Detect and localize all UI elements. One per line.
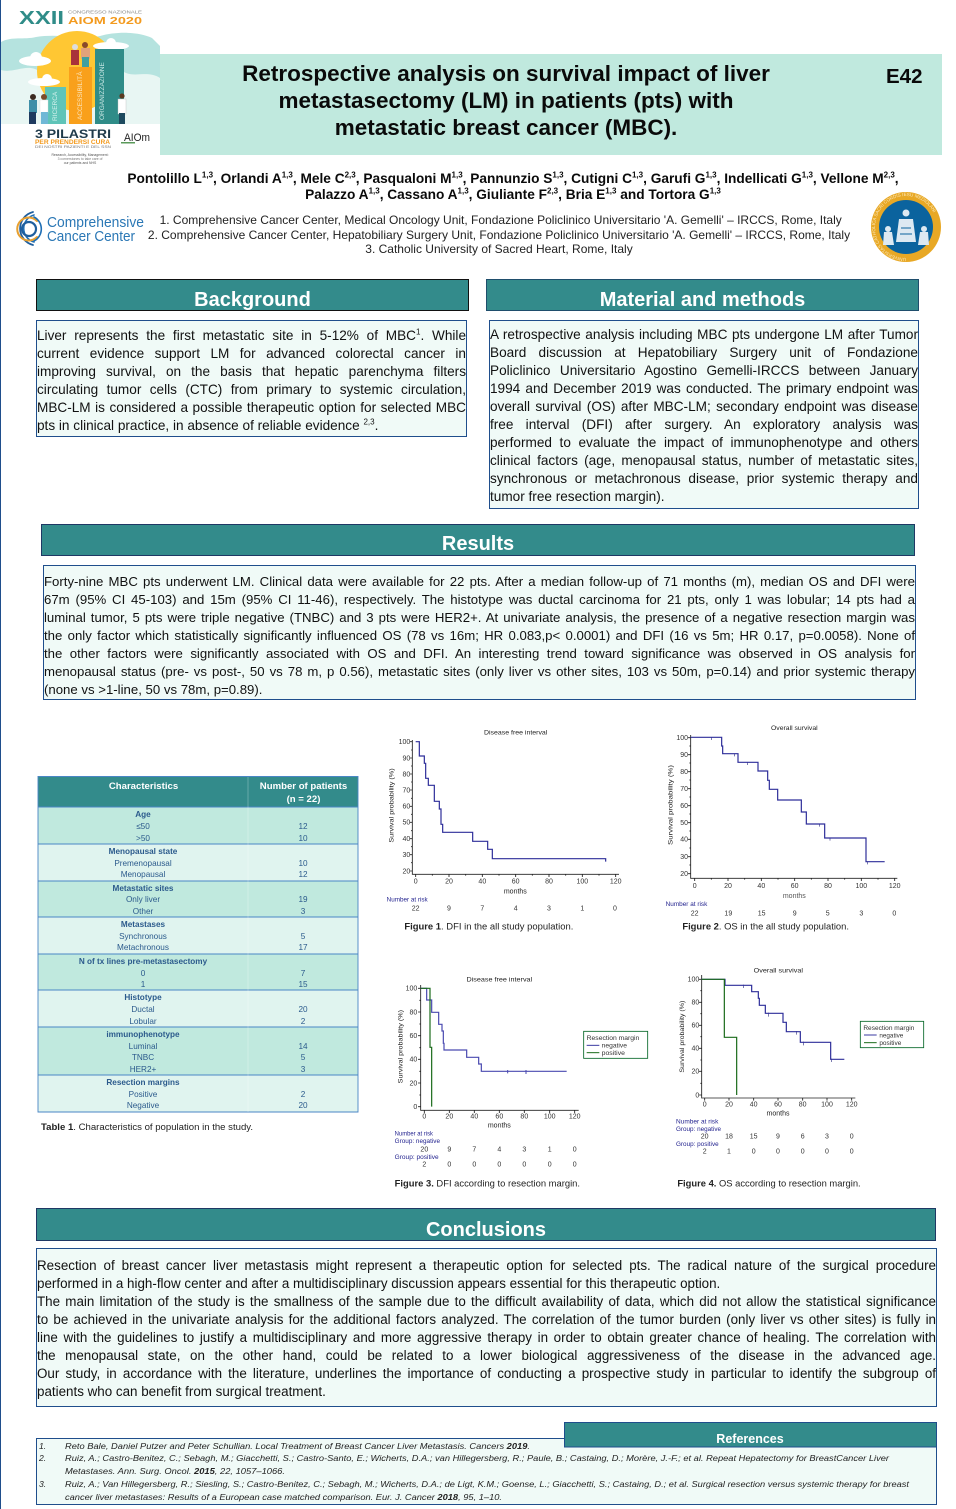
chart: figure 4 OS by resection margin: 0 bbox=[752, 1148, 756, 1155]
chart: figure 1 DFI: 7 bbox=[480, 905, 484, 912]
table: characteristics of population: 19 bbox=[298, 895, 308, 904]
chart: figure 2 OS: 22 bbox=[691, 910, 699, 917]
heading: results: Results bbox=[442, 533, 514, 555]
text block: conclusions bbox=[36, 1248, 937, 1407]
text block: results: the other factors were significantly associated with OS and DFI. An interesting trend toward significance was observed in OS analysis for bbox=[44, 646, 915, 661]
table: characteristics of population bbox=[38, 776, 358, 1132]
chart: figure 1 DFI: 80 bbox=[545, 879, 553, 886]
table: characteristics of population: 10 bbox=[298, 859, 308, 868]
chart: figure 4 OS by resection margin: 20 bbox=[725, 1101, 733, 1108]
logo: AIOM 2020 congress poster: 3 PILASTRI bbox=[35, 127, 111, 141]
table: characteristics of population: Metachronous bbox=[117, 943, 169, 952]
text block: conclusions: to be achieved in the univariate analysis for the additional factors analyzed. The correlation of the tumor burden (only liver vs other sites) is fully in bbox=[37, 1312, 936, 1327]
text block: background: current evidence support LM for advanced colorectal cancer in bbox=[37, 346, 466, 361]
table: characteristics of population: Table 1. Characteristics of population in the study. bbox=[41, 1122, 253, 1132]
chart: figure 2 OS: 0 bbox=[693, 883, 697, 890]
legend: resection margin: Resection margin bbox=[587, 1035, 640, 1042]
logo: Comprehensive Cancer Center bbox=[16, 211, 144, 246]
text block: material and methods: Policlinico Universitario Agostino Gemelli-IRCCS between January bbox=[490, 363, 918, 378]
reference list: Metastases. Ann. Surg. Oncol. 2015, 22, 1057–1066. bbox=[65, 1466, 285, 1476]
legend: resection margin: positive bbox=[879, 1040, 902, 1047]
heading: references bbox=[564, 1422, 936, 1447]
chart: figure 3 DFI by resection margin: 20 bbox=[445, 1114, 453, 1121]
table: characteristics of population: Only liver bbox=[126, 895, 160, 904]
text block: conclusions: patients who can benefit from surgical treatment. bbox=[37, 1384, 326, 1399]
legend: resection margin: negative bbox=[602, 1043, 627, 1050]
table: characteristics of population: >50 bbox=[136, 834, 150, 843]
table: characteristics of population: 10 bbox=[298, 834, 308, 843]
chart: figure 1 DFI: 9 bbox=[447, 905, 451, 912]
panel: conclusions bbox=[36, 1208, 937, 1407]
table: characteristics of population: 2 bbox=[301, 1017, 306, 1026]
legend: resection margin: positive bbox=[602, 1050, 626, 1057]
text block: material and methods bbox=[489, 320, 919, 509]
text block: results bbox=[43, 565, 916, 700]
panel: material and methods bbox=[486, 279, 919, 509]
pillars bbox=[45, 87, 66, 124]
chart: figure 3 DFI by resection margin: Number at risk bbox=[395, 1131, 434, 1138]
text block: background: improving survival, on the basis that hepatic parenchyma filters bbox=[37, 364, 466, 379]
table: characteristics of population: Synchronous bbox=[119, 932, 167, 941]
affiliations: 2. Comprehensive Cancer Center, Hepatobiliary Surgery Unit, Fondazione Policlinico Universitario 'A. Gemelli' – IRCCS, Rome, Italy bbox=[148, 228, 850, 242]
chart: figure 1 DFI: 70 bbox=[403, 787, 410, 794]
chart: figure 1 DFI: 100 bbox=[576, 879, 588, 886]
heading: conclusions bbox=[36, 1208, 936, 1241]
text block: results: luminal tumor, 5 pts were triple negative (TNBC) and 3 pts were HER2+. At univariate analysis, the presence of a negative resection margin was bbox=[44, 610, 915, 625]
legend: resection margin: Resection margin bbox=[863, 1025, 915, 1032]
table: characteristics of population: Other bbox=[133, 907, 154, 916]
chart: figure 4 OS by resection margin: 120 bbox=[846, 1101, 858, 1108]
chart: figure 3 DFI by resection margin: 3 bbox=[522, 1146, 526, 1153]
chart: figure 3 DFI by resection margin: 0 bbox=[413, 1104, 417, 1111]
chart: figure 4 OS by resection margin: 20 bbox=[692, 1069, 699, 1076]
logo: AIOM 2020 congress poster: PER PRENDERSI CURA bbox=[35, 140, 111, 146]
table: characteristics of population: ≤50 bbox=[136, 822, 150, 831]
chart: figure 2 OS: 0 bbox=[892, 910, 896, 917]
clouds bbox=[19, 38, 129, 86]
chart: figure 4 OS by resection margin: Number at risk bbox=[676, 1118, 719, 1125]
chart: figure 1 DFI: 100 bbox=[399, 739, 410, 746]
chart: figure 4 OS by resection margin: 0 bbox=[850, 1134, 854, 1141]
text block: material and methods: Board discussion at Hepatobiliary Surgery unit of Fondazione bbox=[490, 345, 918, 360]
text block: results: 67m (95% CI 45-103) and 15m (95% CI 11-46), respectively. The histotype was ductal carcinoma for 21 pts, only 1 was lobular; 14 pts had a bbox=[44, 592, 915, 607]
text block: conclusions: performed in a high-flow center and after a multidisciplinary discussion appears essential for this therapeutic option. bbox=[37, 1276, 720, 1291]
heading: conclusions: Conclusions bbox=[426, 1219, 546, 1241]
chart: figure 4 OS by resection margin: 15 bbox=[750, 1134, 758, 1141]
people bbox=[29, 42, 126, 124]
chart: figure 1 DFI: months bbox=[504, 889, 527, 896]
table: characteristics of population: Menopausal bbox=[121, 870, 165, 879]
reference list: 1. bbox=[39, 1441, 46, 1451]
table: characteristics of population: 0 bbox=[141, 969, 146, 978]
text block: material and methods: synchronous or metachronous disease, prior systemic therapy and bbox=[490, 471, 918, 486]
text block: material and methods: performed to evaluate the impact of immunophenotype and others bbox=[490, 435, 918, 450]
chart: figure 2 OS: 80 bbox=[680, 769, 688, 776]
chart: figure 4 OS by resection margin: Figure 4. OS according to resection margin. bbox=[677, 1179, 861, 1189]
chart: figure 3 DFI by resection margin: 40 bbox=[470, 1114, 478, 1121]
chart: figure 4 OS by resection margin: months bbox=[767, 1111, 790, 1118]
table: characteristics of population: N of tx lines pre-metastasectomy bbox=[79, 957, 208, 966]
text block: material and methods: free interval (DFI) after surgery. An exploratory analysis was bbox=[490, 417, 918, 432]
chart: figure 1 DFI: 22 bbox=[412, 905, 420, 912]
chart: figure 3 DFI by resection margin: 4 bbox=[497, 1146, 501, 1153]
heading: background: Background bbox=[194, 289, 311, 311]
chart: figure 3 DFI by resection margin: 1 bbox=[548, 1146, 552, 1153]
text block: background bbox=[36, 320, 467, 437]
table: characteristics of population: 20 bbox=[298, 1005, 308, 1014]
logo: AIOM 2020 congress poster: AIOm bbox=[124, 132, 150, 144]
chart: figure 1 DFI: 60 bbox=[403, 804, 410, 811]
chart: figure 3 DFI by resection margin: 9 bbox=[447, 1146, 451, 1153]
table: characteristics of population: (n = 22) bbox=[287, 794, 320, 805]
chart: figure 1 DFI: 40 bbox=[403, 836, 410, 843]
chart: figure 1 DFI: 0 bbox=[613, 905, 617, 912]
chart: figure 2 OS: 3 bbox=[859, 910, 863, 917]
logo: AIOM 2020 congress poster: our patients and NHS bbox=[64, 161, 97, 165]
authors: Pontolillo L1,3, Orlandi A1,3, Mele C2,3, Pasqualoni M1,3, Pannunzio S1,3, Cutigni C1,3, Garufi G1,3, Indellicati G1,3, Vellone M2,3, bbox=[127, 170, 899, 186]
chart: figure 1 DFI: 120 bbox=[610, 879, 622, 886]
logo: university seal: UNIVERSITAS CATHOLICA SACRI CORDIS IESU MEDIOLANI bbox=[872, 192, 936, 262]
reference list bbox=[38, 1441, 910, 1502]
table: characteristics of population: Metastases bbox=[121, 920, 166, 929]
reference list: Ruiz, A.; Castro-Benitez, C.; Sebagh, M.; Giacchetti, S.; Castro-Santo, E.; Wicherts, D.A.; van Hillegersberg, R.; Paule, B.; Castaing, D.; Morère, J.-F.; et al. Repeat Hepatectomy for BreastCancer Liver bbox=[65, 1453, 890, 1463]
table: characteristics of population: TNBC bbox=[132, 1053, 154, 1062]
text block: conclusions: Resection of breast cancer liver metastasis might represent a therapeutic option for selected pts. The radical nature of the surgical procedure bbox=[37, 1258, 936, 1273]
chart: figure 1 DFI: Figure 1. DFI in the all study population. bbox=[404, 921, 573, 931]
table: characteristics of population: Luminal bbox=[129, 1042, 158, 1051]
logo: AIOM 2020 congress poster: ORGANIZZAZIONE bbox=[99, 62, 106, 120]
table: characteristics of population: 5 bbox=[301, 1053, 306, 1062]
table: characteristics of population: 17 bbox=[298, 943, 308, 952]
text block: results: menopausal status (pre- vs post-, 50 vs 78 m, p 0.56), metastatic sites (only liver vs other sites, 103 vs 50m, p=0.14) and prior systemic therapy bbox=[44, 664, 915, 679]
table: characteristics of population: Premenopausal bbox=[114, 859, 172, 868]
heading: references: References bbox=[716, 1432, 784, 1446]
chart: figure 3 DFI by resection margin: 2 bbox=[422, 1162, 426, 1169]
chart: figure 1 DFI: 80 bbox=[403, 771, 410, 778]
chart: figure 2 OS bbox=[666, 725, 901, 932]
chart: figure 1 DFI: Survival probability (%) bbox=[389, 768, 396, 843]
panel: background bbox=[36, 279, 469, 437]
text block: results: (none vs >1-line, 50 vs 78m, p=0.89). bbox=[44, 682, 262, 697]
text block: background: pts in clinical practice, in absence of reliable evidence 2,3. bbox=[37, 417, 378, 433]
chart: figure 2 OS: 15 bbox=[758, 910, 766, 917]
chart: figure 3 DFI by resection margin: 20 bbox=[410, 1080, 417, 1087]
chart: figure 3 DFI by resection margin: Figure 3. DFI according to resection margin. bbox=[395, 1178, 580, 1188]
panel: results bbox=[41, 524, 916, 700]
chart: figure 4 OS by resection margin: 80 bbox=[692, 1000, 699, 1007]
chart: figure 3 DFI by resection margin: Survival probability (%) bbox=[398, 1010, 405, 1083]
chart: figure 2 OS: 30 bbox=[680, 854, 688, 861]
logo: AIOM 2020 congress poster: AIOM 2020 bbox=[68, 16, 143, 27]
title banner bbox=[160, 54, 942, 155]
table: characteristics of population: 12 bbox=[298, 822, 308, 831]
chart: figure 2 OS: 100 bbox=[855, 883, 867, 890]
chart: figure 4 OS by resection margin: 40 bbox=[692, 1046, 699, 1053]
chart: figure 2 OS: Figure 2. OS in the all study population. bbox=[682, 922, 849, 932]
table: characteristics of population: immunophenotype bbox=[106, 1030, 180, 1039]
chart: figure 4 OS by resection margin: 80 bbox=[799, 1101, 807, 1108]
logo: AIOM 2020 congress poster: CONGRESSO NAZIONALE bbox=[68, 10, 142, 14]
chart: figure 3 DFI by resection margin: 60 bbox=[410, 1033, 417, 1040]
logo: Comprehensive Cancer Center: Cancer Center bbox=[47, 228, 135, 245]
title: metastatic breast cancer (MBC). bbox=[335, 115, 677, 140]
chart: figure 1 DFI: 60 bbox=[512, 879, 520, 886]
table: characteristics of population: 20 bbox=[298, 1101, 308, 1110]
chart: figure 4 OS by resection margin: 1 bbox=[727, 1148, 731, 1155]
legend: resection margin: negative bbox=[879, 1032, 904, 1039]
title bbox=[242, 61, 770, 140]
chart: figure 3 DFI by resection margin: 7 bbox=[472, 1146, 476, 1153]
text block: conclusions: the menopausal state, on the other hand, could be related to a lower biological aggressiveness of the disease in the advanced age. bbox=[37, 1348, 936, 1363]
chart: figure 4 OS by resection margin: 6 bbox=[801, 1134, 805, 1141]
chart: figure 3 DFI by resection margin: Group: positive bbox=[395, 1154, 439, 1161]
text block: conclusions: line with the guidelines to justify a multidisciplinary and more aggressive therapy in order to obtain greater chance of healing. The correlation with bbox=[37, 1330, 936, 1345]
logo: AIOM 2020 congress poster: RICERCA bbox=[52, 91, 59, 121]
text block: background: Liver represents the first metastatic site in 5-12% of MBC1. While bbox=[37, 327, 466, 343]
chart: figure 2 OS: 90 bbox=[680, 752, 688, 759]
chart: figure 4 OS by resection margin bbox=[676, 968, 924, 1189]
chart: figure 4 OS by resection margin: Group: negative bbox=[676, 1126, 721, 1133]
chart: figure 2 OS: 40 bbox=[680, 837, 688, 844]
table: characteristics of population: 3 bbox=[301, 907, 306, 916]
chart: figure 4 OS by resection margin: 100 bbox=[821, 1101, 833, 1108]
chart: figure 3 DFI by resection margin: 0 bbox=[548, 1162, 552, 1169]
text block: material and methods: overall survival (OS) after MBC-LM; secondary endpoint was disease bbox=[490, 399, 918, 414]
chart: figure 2 OS: 19 bbox=[724, 910, 732, 917]
title: metastasectomy (LM) in patients (pts) with bbox=[278, 88, 734, 113]
chart: figure 3 DFI by resection margin: 0 bbox=[573, 1146, 577, 1153]
text block: background: MBC-LM is considered a possible therapeutic option for selected MBC bbox=[37, 400, 466, 415]
chart: figure 1 DFI: 0 bbox=[414, 879, 418, 886]
logo: AIOM 2020 congress poster: Research, Accessibility, Management: bbox=[51, 153, 109, 157]
table: characteristics of population: Age bbox=[135, 810, 151, 819]
text block: background: circulating tumor cells (CTC) from primary to systemic circulation, bbox=[37, 382, 466, 397]
logo: AIOM 2020 congress poster: DEI NOSTRI PAZIENTI E DEL SSN bbox=[35, 144, 111, 149]
chart: figure 3 DFI by resection margin: 80 bbox=[520, 1114, 528, 1121]
chart: figure 1 DFI: 20 bbox=[403, 868, 410, 875]
chart: figure 4 OS by resection margin: 0 bbox=[695, 1092, 699, 1099]
table: characteristics of population: 15 bbox=[298, 980, 308, 989]
chart: figure 3 DFI by resection margin: 0 bbox=[472, 1162, 476, 1169]
chart: figure 3 DFI by resection margin: 100 bbox=[406, 986, 417, 993]
heading: results bbox=[41, 524, 915, 556]
chart: figure 4 OS by resection margin: 0 bbox=[703, 1101, 707, 1108]
chart: figure 3 DFI by resection margin: 120 bbox=[569, 1114, 581, 1121]
chart: figure 2 OS: 120 bbox=[889, 883, 901, 890]
text block: material and methods: A retrospective analysis including MBC pts undergone LM after Tumor bbox=[490, 327, 918, 342]
chart: figure 1 DFI: Disease free interval bbox=[484, 729, 548, 736]
text block: material and methods: clinical factors (age, menopausal status, number of metastatic sites, bbox=[490, 453, 918, 468]
chart: figure 1 DFI: 50 bbox=[403, 820, 410, 827]
chart: figure 3 DFI by resection margin: 0 bbox=[522, 1162, 526, 1169]
chart: figure 2 OS: 60 bbox=[791, 883, 799, 890]
authors: Palazzo A1,3, Cassano A1,3, Giuliante F2,3, Bria E1,3 and Tortora G1,3 bbox=[305, 186, 721, 202]
chart: figure 2 OS: Survival probability (%) bbox=[668, 765, 675, 845]
chart: figure 2 OS: 80 bbox=[824, 883, 832, 890]
chart: figure 1 DFI: 20 bbox=[445, 879, 453, 886]
chart: figure 1 DFI: Number at risk bbox=[387, 897, 428, 904]
text block: material and methods: tumor free resection margin). bbox=[490, 489, 665, 504]
chart: figure 3 DFI by resection margin: Group: negative bbox=[395, 1138, 440, 1145]
chart: figure 4 OS by resection margin: 3 bbox=[825, 1134, 829, 1141]
text block: results: the only factor which statistically significantly influenced OS (78 vs 16m; HR 0.083,p< 0.0001) and DFI (16 vs 5m; HR 0.17, p=0.0058). None of bbox=[44, 628, 915, 643]
table: characteristics of population: Characteristics bbox=[109, 781, 178, 792]
chart: figure 1 DFI bbox=[387, 729, 622, 932]
text block: conclusions: The main limitation of the study is the smallness of the sample due to the difficult availability of data, which did not allow the statistical significance bbox=[37, 1294, 936, 1309]
chart: figure 2 OS: Overall survival bbox=[771, 725, 818, 732]
table: characteristics of population: Metastatic sites bbox=[113, 884, 174, 893]
table: characteristics of population: Resection margins bbox=[106, 1078, 180, 1087]
chart: figure 2 OS: 60 bbox=[680, 803, 688, 810]
chart: figure 4 OS by resection margin: 0 bbox=[801, 1148, 805, 1155]
logo: AIOM 2020 congress poster: 3 cornerstones to take care of bbox=[58, 157, 102, 161]
chart: figure 4 OS by resection margin: 100 bbox=[688, 977, 699, 984]
chart: figure 1 DFI: 40 bbox=[478, 879, 486, 886]
authors bbox=[127, 170, 899, 202]
chart: figure 4 OS by resection margin: 18 bbox=[725, 1134, 733, 1141]
chart: figure 4 OS by resection margin: 60 bbox=[692, 1023, 699, 1030]
table: characteristics of population: 2 bbox=[301, 1090, 306, 1099]
chart: figure 1 DFI: 4 bbox=[514, 905, 518, 912]
chart: figure 4 OS by resection margin: Group: positive bbox=[676, 1141, 719, 1148]
chart: figure 4 OS by resection margin: Survival probability (%) bbox=[679, 1001, 686, 1073]
text block: material and methods: 1994 and December 2019 was conducted. The primary endpoint was bbox=[490, 381, 918, 396]
chart: figure 1 DFI: 30 bbox=[403, 852, 410, 859]
poster code: E42 bbox=[886, 65, 922, 88]
chart: figure 3 DFI by resection margin: 0 bbox=[447, 1162, 451, 1169]
reference list: 3. bbox=[39, 1479, 46, 1489]
sun bbox=[37, 31, 117, 111]
table: characteristics of population: Positive bbox=[129, 1090, 158, 1099]
title: Retrospective analysis on survival impact of liver bbox=[242, 61, 770, 86]
chart: figure 2 OS: 100 bbox=[676, 735, 688, 742]
chart: figure 4 OS by resection margin: 0 bbox=[850, 1148, 854, 1155]
reference list: cancer liver metastases: Results of a European case matched comparison. Eur. J. Cancer 2018, 95, 1–10. bbox=[65, 1492, 502, 1502]
logo: AIOM 2020 congress poster bbox=[1, 7, 160, 165]
chart: figure 3 DFI by resection margin: 80 bbox=[410, 1009, 417, 1016]
chart: figure 3 DFI by resection margin: 0 bbox=[573, 1162, 577, 1169]
chart: figure 2 OS: 70 bbox=[680, 786, 688, 793]
chart: figure 4 OS by resection margin: 20 bbox=[701, 1134, 709, 1141]
affiliations bbox=[148, 213, 850, 256]
table: characteristics of population: Ductal bbox=[131, 1005, 155, 1014]
legend: resection margin bbox=[860, 1021, 924, 1048]
chart: figure 3 DFI by resection margin: months bbox=[488, 1123, 511, 1130]
chart: figure 3 DFI by resection margin: 40 bbox=[410, 1057, 417, 1064]
table: characteristics of population: Number of patients bbox=[260, 781, 347, 792]
table: characteristics of population: Lobular bbox=[129, 1017, 157, 1026]
chart: figure 2 OS: 9 bbox=[793, 910, 797, 917]
logo: AIOM 2020 congress poster: ACCESSIBILITÀ bbox=[75, 71, 84, 120]
chart: figure 4 OS by resection margin: 40 bbox=[750, 1101, 758, 1108]
table: characteristics of population: HER2+ bbox=[130, 1065, 157, 1074]
chart: figure 2 OS: Number at risk bbox=[666, 901, 708, 908]
table: characteristics of population: Menopausal state bbox=[109, 847, 178, 856]
table: characteristics of population: 12 bbox=[298, 870, 308, 879]
chart: figure 4 OS by resection margin: 0 bbox=[825, 1148, 829, 1155]
chart: figure 2 OS: months bbox=[783, 893, 806, 900]
affiliations: 3. Catholic University of Sacred Heart, Rome, Italy bbox=[365, 242, 633, 256]
chart: figure 2 OS: 40 bbox=[757, 883, 765, 890]
chart: figure 2 OS: 20 bbox=[680, 871, 688, 878]
heading: material and methods bbox=[486, 279, 919, 311]
chart: figure 4 OS by resection margin: 0 bbox=[776, 1148, 780, 1155]
chart: figure 3 DFI by resection margin: 60 bbox=[495, 1114, 503, 1121]
chart: figure 3 DFI by resection margin: Disease free interval bbox=[466, 977, 533, 984]
reference list: Reto Bale, Daniel Putzer and Peter Schullian. Local Treatment of Breast Cancer Liver Metastasis. Cancers 2019. bbox=[65, 1441, 530, 1451]
chart: figure 2 OS: 20 bbox=[724, 883, 732, 890]
chart: figure 3 DFI by resection margin bbox=[394, 977, 648, 1188]
chart: figure 3 DFI by resection margin: 20 bbox=[420, 1146, 428, 1153]
left page border bbox=[0, 0, 1, 1509]
reference list: 2. bbox=[38, 1453, 46, 1463]
chart: figure 3 DFI by resection margin: 0 bbox=[497, 1162, 501, 1169]
table: characteristics of population: Histotype bbox=[124, 993, 162, 1002]
chart: figure 1 DFI: 3 bbox=[547, 905, 551, 912]
chart: figure 4 OS by resection margin: 9 bbox=[776, 1134, 780, 1141]
heading: background bbox=[36, 279, 469, 311]
text block: conclusions: Our study, in accordance with the literature, underlines the importance of conducting a prospective study in particular to identify the subgroup of bbox=[37, 1366, 936, 1381]
chart: figure 2 OS: 50 bbox=[680, 820, 688, 827]
affiliations: 1. Comprehensive Cancer Center, Medical Oncology Unit, Fondazione Policlinico Universitario 'A. Gemelli' – IRCCS, Rome, Italy bbox=[160, 213, 842, 227]
table: characteristics of population: 5 bbox=[301, 932, 306, 941]
chart: figure 3 DFI by resection margin: 100 bbox=[544, 1114, 556, 1121]
table: characteristics of population: Negative bbox=[127, 1101, 160, 1110]
panel: references bbox=[36, 1422, 937, 1505]
chart: figure 4 OS by resection margin: 2 bbox=[703, 1148, 707, 1155]
reference list: Ruiz, A.; Van Hillegersberg, R.; Siesling, S.; Castro-Benitez, C.; Sebagh, M.; Wicherts, D.A.; de Ligt, K.M.; Goense, L.; Giacchetti, S.; Castaing, D.; et al. Surgical resection versus systemic therapy for breast bbox=[65, 1479, 910, 1489]
chart: figure 4 OS by resection margin: Overall survival bbox=[754, 968, 804, 975]
chart: figure 2 OS: 5 bbox=[826, 910, 830, 917]
congress title: XXII bbox=[19, 7, 64, 28]
chart: figure 3 DFI by resection margin: 0 bbox=[422, 1114, 426, 1121]
legend: resection margin bbox=[584, 1031, 648, 1058]
heading: material and methods: Material and methods bbox=[600, 289, 805, 311]
table: characteristics of population: 7 bbox=[301, 969, 306, 978]
table: characteristics of population: 14 bbox=[298, 1042, 308, 1051]
chart: figure 1 DFI: 1 bbox=[580, 905, 584, 912]
table: characteristics of population: 1 bbox=[141, 980, 146, 989]
text block: results: Forty-nine MBC pts underwent LM. Clinical data were available for 22 pts. After a median follow-up of 71 months (m), median OS and DFI were bbox=[44, 574, 915, 589]
chart: figure 1 DFI: 90 bbox=[403, 755, 410, 762]
table: characteristics of population: 3 bbox=[301, 1065, 306, 1074]
chart: figure 4 OS by resection margin: 60 bbox=[774, 1101, 782, 1108]
